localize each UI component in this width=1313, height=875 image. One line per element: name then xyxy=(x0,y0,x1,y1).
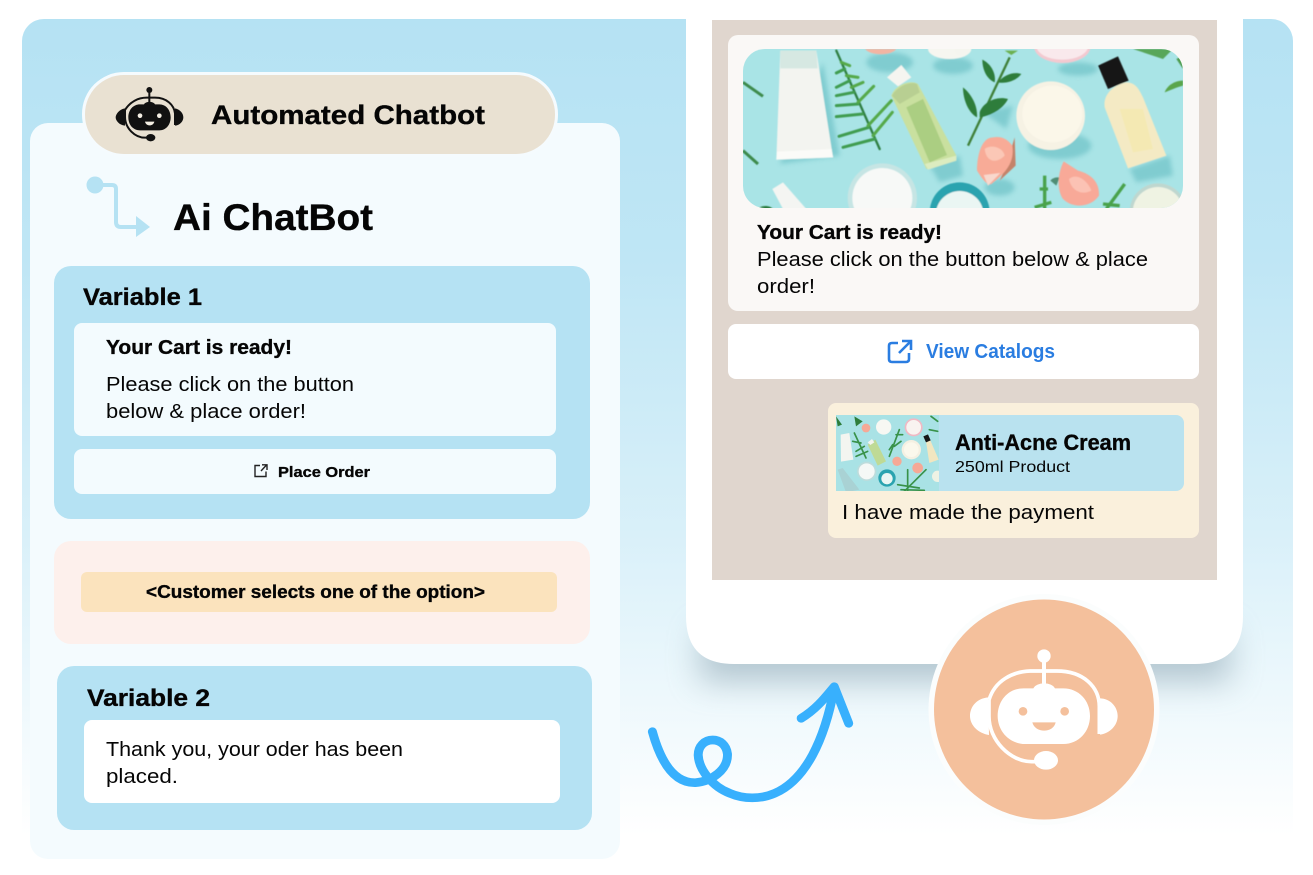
panel: Variable 1 xyxy=(54,266,590,519)
title: Ai ChatBot: Ai ChatBot xyxy=(173,197,373,238)
customer reply bubble: 250ml Product xyxy=(955,459,1071,476)
message box: below & place order! xyxy=(106,401,306,423)
message box: placed. xyxy=(106,766,178,788)
panel: Variable 1: Variable 1 xyxy=(83,284,202,311)
button: Place Order xyxy=(74,449,556,494)
phone screen xyxy=(712,20,1217,580)
message box: Please click on the button xyxy=(106,374,354,396)
button: View Catalogs xyxy=(728,324,1199,379)
panel: Variable 2 xyxy=(57,666,592,830)
panel: Ai ChatBot flow xyxy=(30,72,620,859)
panel: Variable 2: Variable 2 xyxy=(87,685,210,712)
heading pill: Automated Chatbot xyxy=(82,72,558,157)
button: View Catalogs: View Catalogs xyxy=(926,341,1055,363)
icon: black robot xyxy=(116,87,183,141)
chat message card: order! xyxy=(757,276,815,298)
customer reply bubble: Anti-Acne Cream xyxy=(955,430,1131,455)
chat message card: Please click on the button below & place xyxy=(757,249,1148,271)
right half of photo xyxy=(929,49,1183,208)
message box xyxy=(74,323,556,436)
arrow: curly blue arrow xyxy=(652,687,849,798)
product thumbnail xyxy=(836,415,943,492)
customer reply bubble: I have made the payment xyxy=(842,502,1094,524)
panel: customer selection xyxy=(54,541,590,644)
button: Place Order: Place Order xyxy=(278,464,370,481)
message box: Thank you, your oder has been xyxy=(106,739,403,761)
icon: white robot xyxy=(970,649,1118,770)
message box xyxy=(84,720,560,803)
icon: flow connector arrow xyxy=(86,176,150,237)
icon: external link xyxy=(889,341,911,362)
panel: customer selection: <Customer selects one of the option> xyxy=(146,582,485,602)
icon: peach robot badge xyxy=(928,594,1160,825)
product photo xyxy=(743,49,1183,208)
chat message card xyxy=(728,30,1199,311)
phone mockup xyxy=(686,19,1243,682)
left half of photo xyxy=(743,49,974,208)
heading text: Automated Chatbot xyxy=(211,100,485,130)
customer reply bubble xyxy=(828,403,1199,538)
chat message card: Your Cart is ready! xyxy=(757,222,942,244)
message box: Your Cart is ready! xyxy=(106,337,292,359)
